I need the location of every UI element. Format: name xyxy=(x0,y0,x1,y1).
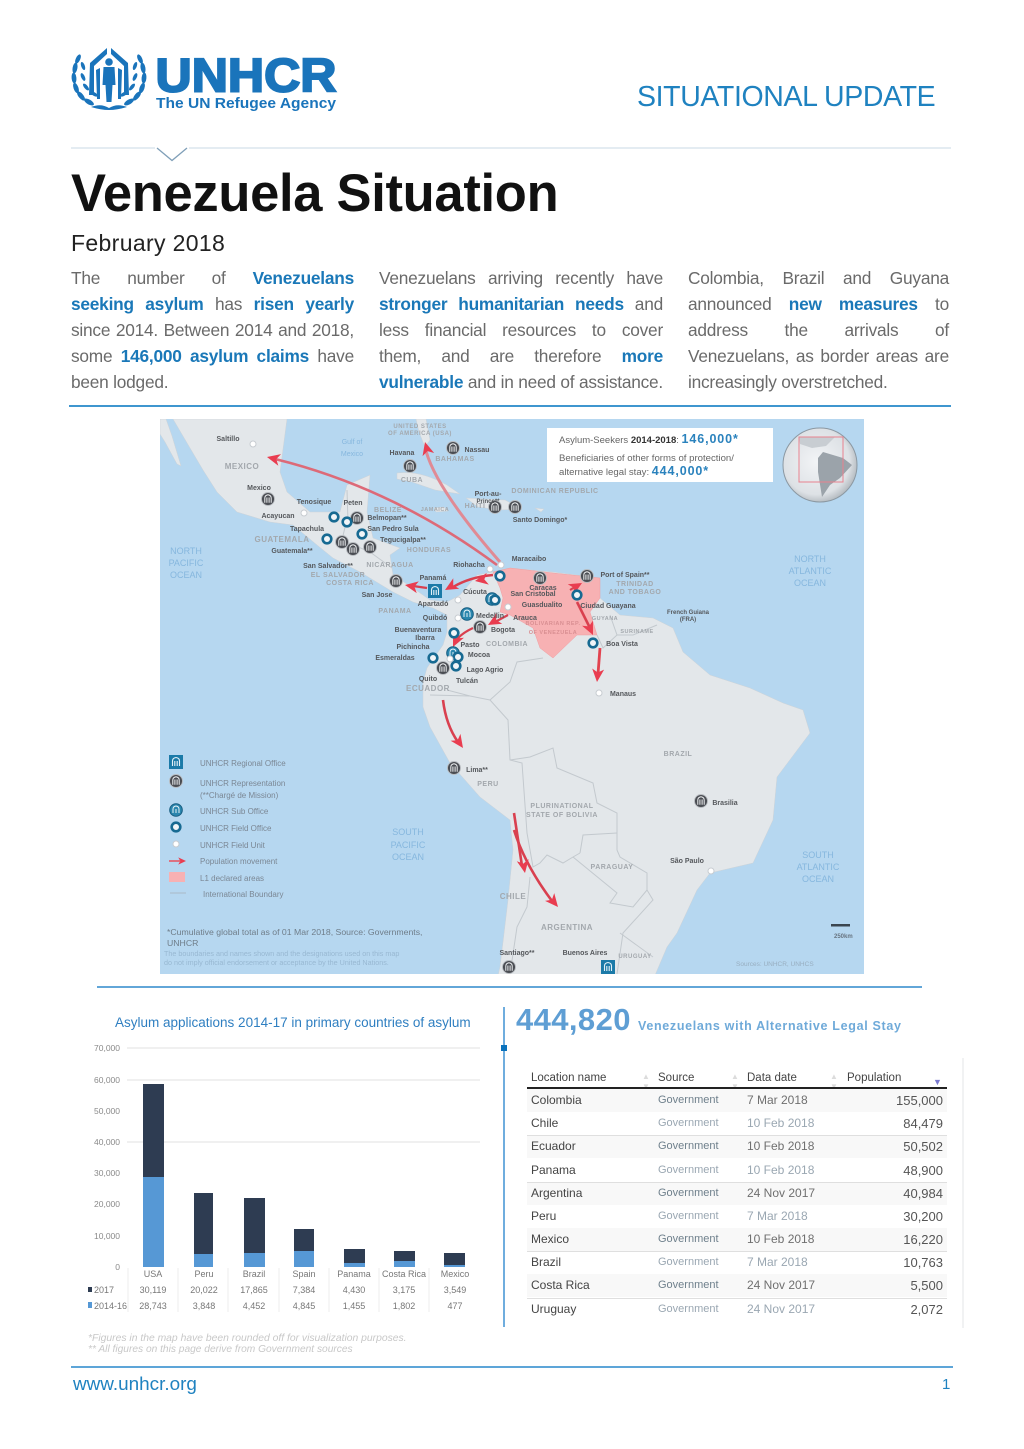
map legend: UNHCR Field Unit xyxy=(200,841,266,850)
map city labels: Caracas xyxy=(529,585,557,592)
map city labels: Acayucan xyxy=(261,513,295,520)
map ocean labels: ATLANTIC xyxy=(797,862,840,872)
table header: ▲ xyxy=(731,1072,739,1081)
map notes: The boundaries and names shown and the designations used on this map xyxy=(164,949,399,958)
table header: ▼ xyxy=(642,1082,650,1091)
text block: column 1: The number of Venezuelans xyxy=(71,268,354,288)
map country labels: MEXICO xyxy=(225,462,259,471)
map country labels: UNITED STATES xyxy=(393,424,447,430)
map ocean labels: OCEAN xyxy=(392,852,424,862)
map country labels: URUGUAY xyxy=(618,954,652,960)
chart legend xyxy=(88,1285,127,1311)
map arrowheads xyxy=(266,440,604,911)
chart data table xyxy=(139,1269,469,1311)
map city labels: Nassau xyxy=(465,447,489,454)
table: population by country: Brazil xyxy=(531,1254,561,1268)
table: population by country: Government xyxy=(658,1117,719,1129)
text block: column 3: Venezuelans, as border areas are xyxy=(688,346,949,366)
map notes: UNHCR xyxy=(167,938,198,948)
map city labels: Tulcán xyxy=(456,678,478,685)
footnotes xyxy=(88,1333,407,1355)
map globe locator xyxy=(783,428,857,502)
table: population by country: 16,220 xyxy=(903,1232,943,1246)
chart y axis: 60,000 xyxy=(94,1075,120,1085)
map city labels: Ciudad Guayana xyxy=(580,603,636,610)
table: population by country: 7 Mar 2018 xyxy=(747,1254,808,1268)
table: population by country: Government xyxy=(658,1302,719,1314)
text block: column 3 xyxy=(688,268,950,392)
text block: column 3: address the arrivals of xyxy=(688,320,949,340)
table: population by country: 7 Mar 2018 xyxy=(747,1093,808,1107)
table: population by country: Government xyxy=(658,1140,719,1152)
map country labels: OF AMERICA (USA) xyxy=(388,431,452,437)
chart y axis: 20,000 xyxy=(94,1199,120,1209)
text block: column 2: stronger humanitarian needs and xyxy=(379,294,663,314)
table: population by country: Government xyxy=(658,1164,719,1176)
map city labels: Lago Agrio xyxy=(467,667,503,674)
map legend: International Boundary xyxy=(203,890,284,899)
map city labels: San Pedro Sula xyxy=(367,526,419,533)
table: population by country: Colombia xyxy=(531,1093,582,1107)
chart data table: 20,022 xyxy=(190,1285,218,1295)
map city labels: Cúcuta xyxy=(463,589,487,596)
map ocean labels: SOUTH xyxy=(392,827,424,837)
map city labels: Boa Vista xyxy=(606,641,638,648)
text block: column 2: vulnerable and in need of assistance. xyxy=(379,372,663,392)
map city labels: Medellin xyxy=(476,613,504,620)
map city labels: Santo Domingo* xyxy=(513,517,567,524)
footnotes: ** All figures on this page derive from Government sources xyxy=(88,1344,353,1355)
map ocean labels: NORTH xyxy=(794,554,826,564)
table: population by country: Government xyxy=(658,1232,719,1244)
map country labels: BOLIVARIAN REP. xyxy=(526,621,580,627)
map city labels: Esmeraldas xyxy=(375,655,415,662)
table header: ▼ xyxy=(933,1077,942,1087)
text block: column 2: Venezuelans arriving recently have xyxy=(379,268,663,288)
chart data table: USA xyxy=(144,1269,162,1279)
text block: column 1: been lodged. xyxy=(71,372,168,392)
map country labels: CUBA xyxy=(401,477,423,484)
map country labels: BAHAMAS xyxy=(435,456,475,463)
table: population by country: 24 Nov 2017 xyxy=(747,1186,815,1200)
table: population by country: Government xyxy=(658,1210,719,1222)
map background: ocean xyxy=(160,419,864,974)
map legend: (**Chargé de Mission) xyxy=(200,791,279,800)
chart y axis: 50,000 xyxy=(94,1106,120,1116)
table: population by country: 7 Mar 2018 xyxy=(747,1208,808,1222)
map city labels: Quibdó xyxy=(423,615,447,622)
map country labels: PANAMA xyxy=(378,608,412,615)
chart y axis: 70,000 xyxy=(94,1043,120,1053)
map country labels: ECUADOR xyxy=(406,684,450,693)
map info box: totals: Beneficiaries of other forms of protection/ xyxy=(559,453,734,464)
map country labels: BRAZIL xyxy=(664,751,693,758)
map country labels: BELIZE xyxy=(374,507,402,514)
chart data table: Costa Rica xyxy=(382,1269,426,1279)
text block: column 2: them, and are therefore more xyxy=(379,346,663,366)
map city labels: Manaus xyxy=(610,691,636,698)
map country labels: PARAGUAY xyxy=(591,864,633,871)
map ocean labels xyxy=(169,439,840,884)
map city labels: Guatemala** xyxy=(271,548,313,555)
map country labels: CHILE xyxy=(500,892,526,901)
chart data table: 28,743 xyxy=(139,1301,167,1311)
table: population by country: 24 Nov 2017 xyxy=(747,1278,815,1292)
table: population by country: 5,500 xyxy=(910,1278,943,1292)
chart y axis: 0 xyxy=(115,1262,120,1272)
map country labels: ARGENTINA xyxy=(541,923,593,932)
chart data table: 3,848 xyxy=(193,1301,215,1311)
map city labels: (FRA) xyxy=(680,617,696,623)
map office markers xyxy=(250,441,714,974)
map: Venezuela situation in the Americas xyxy=(160,419,864,974)
map city labels: Belmopan** xyxy=(367,515,407,522)
chart legend: 2014-16 xyxy=(94,1301,127,1311)
map country labels: JAMAICA xyxy=(421,507,449,513)
map country labels: TRINIDAD xyxy=(616,581,654,588)
table header: ▲ xyxy=(830,1072,838,1081)
map land masses xyxy=(160,419,810,980)
table: population by country: Costa Rica xyxy=(531,1278,590,1292)
map city labels: Arauca xyxy=(513,615,537,622)
chart y axis: 10,000 xyxy=(94,1231,120,1241)
chart data table: 3,549 xyxy=(444,1285,466,1295)
map country labels: HONDURAS xyxy=(407,547,451,554)
chart data table: Spain xyxy=(292,1269,316,1279)
logo: UNHCR xyxy=(72,48,338,112)
map city labels: Ibarra xyxy=(415,635,435,642)
map ocean labels: Mexico xyxy=(341,451,363,458)
table: population by country: Government xyxy=(658,1278,719,1290)
chart legend: 2017 xyxy=(94,1285,114,1295)
table: population by country: Argentina xyxy=(531,1186,582,1200)
logo: UNHCR: UNHCR xyxy=(156,50,336,102)
table: population by country: 10 Feb 2018 xyxy=(747,1139,814,1153)
table: population by country: Mexico xyxy=(531,1232,569,1246)
map city labels: Mexico xyxy=(247,485,271,492)
map city labels: Port-au- xyxy=(475,491,502,498)
chart data table: 4,845 xyxy=(293,1301,315,1311)
table: population by country: 155,000 xyxy=(896,1093,943,1108)
map country labels: COSTA RICA xyxy=(326,580,374,587)
title: Venezuela Situation xyxy=(71,164,558,223)
map country labels: DOMINICAN REPUBLIC xyxy=(511,488,599,495)
map city labels: Port of Spain** xyxy=(600,572,650,579)
map city labels: Maracaibo xyxy=(512,556,546,563)
table: population by country: Government xyxy=(658,1256,719,1268)
map legend: UNHCR Representation xyxy=(200,779,285,788)
map city labels: Riohacha xyxy=(453,562,485,569)
chart data table: Brazil xyxy=(243,1269,265,1279)
map ocean labels: PACIFIC xyxy=(391,840,426,850)
chart bars xyxy=(143,1084,465,1267)
map ocean labels: PACIFIC xyxy=(169,558,204,568)
chart data table: 3,175 xyxy=(393,1285,415,1295)
map city labels: Tenosique xyxy=(297,499,331,506)
table: population by country: 10,763 xyxy=(903,1254,943,1270)
map city labels: Buenaventura xyxy=(395,627,441,634)
chart y axis: 30,000 xyxy=(94,1168,120,1178)
table: population by country: Peru xyxy=(531,1208,556,1222)
table header: Data date xyxy=(747,1072,797,1084)
table header: ▼ xyxy=(731,1082,739,1091)
map city labels: Pasto xyxy=(460,642,480,649)
map info box: totals: alternative legal stay: 444,000* xyxy=(559,464,709,478)
big number: 444,820 xyxy=(516,1002,631,1037)
table: population by country: Government xyxy=(658,1094,719,1106)
map city labels: Saltillo xyxy=(217,436,239,443)
table: population by country: 50,502 xyxy=(903,1139,943,1154)
table: population by country xyxy=(527,1072,947,1316)
text block: column 1 xyxy=(71,268,354,392)
map ocean labels: ATLANTIC xyxy=(789,566,832,576)
map city labels: Buenos Aires xyxy=(563,950,608,957)
map country labels: GUATEMALA xyxy=(254,535,310,544)
map city labels xyxy=(217,436,738,957)
map country labels: HAITI xyxy=(465,503,485,510)
table: population by country: 10 Feb 2018 xyxy=(747,1116,814,1130)
table header: Location name xyxy=(531,1072,606,1084)
map city labels: Brasilia xyxy=(712,800,738,807)
map country labels: COLOMBIA xyxy=(486,641,528,648)
table: population by country: 10 Feb 2018 xyxy=(747,1162,814,1176)
chart y axis: 40,000 xyxy=(94,1137,120,1147)
text block: column 2 xyxy=(379,268,663,392)
table: population by country: 24 Nov 2017 xyxy=(747,1302,815,1316)
map notes: *Cumulative global total as of 01 Mar 2018, Source: Governments, xyxy=(167,927,422,937)
table: population by country: Government xyxy=(658,1186,719,1198)
footer: website: www.unhcr.org xyxy=(73,1374,197,1395)
text block: column 3: announced new measures to xyxy=(688,294,949,314)
map country labels: NICARAGUA xyxy=(366,562,414,569)
chart data table: 1,455 xyxy=(343,1301,365,1311)
Venezuela declared area xyxy=(493,568,600,658)
chart data table: 7,384 xyxy=(293,1285,315,1295)
subtitle: date: February 2018 xyxy=(71,230,225,256)
map country labels: EL SALVADOR xyxy=(311,572,365,579)
text block: column 1: some 146,000 asylum claims have xyxy=(71,346,354,366)
map city labels: Bogota xyxy=(491,627,515,634)
table header: Source xyxy=(658,1072,694,1084)
map info box: totals xyxy=(547,428,773,482)
map city labels: Prince** xyxy=(476,499,500,505)
map scale bar: 250km xyxy=(834,934,853,940)
table: population by country: Uruguay xyxy=(531,1302,576,1316)
chart data table: 17,865 xyxy=(240,1285,268,1295)
map city labels: Tegucigalpa** xyxy=(380,537,426,544)
map country labels: OF VENEZUELA xyxy=(529,630,577,636)
map legend: Population movement xyxy=(200,857,278,866)
map country labels xyxy=(225,424,693,960)
footnotes: *Figures in the map have been rounded off for visualization purposes. xyxy=(88,1333,407,1344)
map legend: L1 declared areas xyxy=(200,874,264,883)
chart data table: Panama xyxy=(337,1269,371,1279)
header divider with chevron xyxy=(71,147,951,162)
table: population by country: Chile xyxy=(531,1116,558,1130)
map legend: UNHCR Field Office xyxy=(200,824,272,833)
table header: ▲ xyxy=(642,1072,650,1081)
table: population by country: 10 Feb 2018 xyxy=(747,1232,814,1246)
map city labels: Peten xyxy=(343,500,363,507)
text block: column 3: increasingly overstretched. xyxy=(688,372,888,392)
table: population by country: Ecuador xyxy=(531,1139,576,1153)
table: population by country: Panama xyxy=(531,1162,576,1176)
map ocean labels: OCEAN xyxy=(170,570,202,580)
map international boundaries xyxy=(342,490,657,974)
footer: page number: 1 xyxy=(942,1376,950,1393)
map city labels: San Jose xyxy=(362,592,392,599)
heading: situational update: SITUATIONAL UPDATE xyxy=(637,81,935,113)
map info box: totals: Asylum-Seekers 2014-2018: 146,000* xyxy=(559,432,739,446)
chart title: Asylum applications 2014-17 in primary countries of asylum xyxy=(115,1015,471,1030)
panel: alternative legal stay xyxy=(501,1007,964,1328)
map ocean labels: OCEAN xyxy=(802,874,834,884)
text block: column 1: since 2014. Between 2014 and 2018, xyxy=(71,320,354,340)
chart data table: 4,430 xyxy=(343,1285,365,1295)
map notes xyxy=(164,927,422,967)
map city labels: Apartadó xyxy=(418,601,448,608)
text block: column 2: less financial resources to cover xyxy=(379,320,663,340)
chart data table: 1,802 xyxy=(393,1301,415,1311)
map ocean labels: Gulf of xyxy=(342,439,362,446)
chart data table: 477 xyxy=(447,1301,463,1311)
map city labels: French Guiana xyxy=(667,610,710,616)
map city labels: Mocoa xyxy=(468,652,490,659)
map legend xyxy=(169,755,286,899)
chart data table: Mexico xyxy=(441,1269,469,1279)
map city labels: Quito xyxy=(419,676,437,683)
chart data table: 4,452 xyxy=(243,1301,265,1311)
map sources: Sources: UNHCR, UNHCS xyxy=(736,961,814,968)
text block: column 3: Colombia, Brazil and Guyana xyxy=(688,268,949,288)
table: population by country: 48,900 xyxy=(903,1162,943,1178)
map ocean labels: OCEAN xyxy=(794,578,826,588)
map country labels: STATE OF BOLIVIA xyxy=(526,812,598,819)
chart y axis xyxy=(94,1043,120,1272)
table: population by country: 2,072 xyxy=(910,1302,943,1316)
map ocean labels: SOUTH xyxy=(802,850,834,860)
map country labels: PERU xyxy=(477,781,499,788)
map city labels: Lima** xyxy=(466,767,488,774)
map country labels: SURINAME xyxy=(620,629,654,635)
chart: asylum applications stacked bars xyxy=(88,1015,480,1355)
table: population by country: 84,479 xyxy=(903,1116,943,1131)
map ocean labels: NORTH xyxy=(170,546,202,556)
map city labels: San Cristobal xyxy=(510,591,556,598)
table header xyxy=(531,1072,942,1091)
map city labels: São Paulo xyxy=(670,858,704,865)
map country labels: PLURINATIONAL xyxy=(530,803,594,810)
map city labels: Santiago** xyxy=(499,950,535,957)
text block: column 1: seeking asylum has risen yearly xyxy=(71,294,354,314)
map city labels: San Salvador** xyxy=(303,563,353,570)
logo: UNHCR: The UN Refugee Agency xyxy=(156,95,337,112)
map city labels: Pichincha xyxy=(396,644,430,651)
map city labels: Tapachula xyxy=(290,526,324,533)
table: population by country: 40,984 xyxy=(903,1186,943,1200)
table header: Population xyxy=(847,1072,901,1084)
map legend: UNHCR Regional Office xyxy=(200,759,286,768)
map scale bar xyxy=(831,924,853,940)
chart data table: Peru xyxy=(194,1269,214,1279)
map notes: do not imply official endorsement or acceptance by the United Nations. xyxy=(164,958,389,967)
map country labels: GUYANA xyxy=(592,616,618,622)
map city labels: Havana xyxy=(390,450,415,457)
map country labels: AND TOBAGO xyxy=(609,589,661,596)
map legend: UNHCR Sub Office xyxy=(200,807,269,816)
subtitle: alternative legal stay: Venezuelans with Alternative Legal Stay xyxy=(638,1019,902,1033)
map city labels: Guasdualito xyxy=(522,602,562,609)
map population movement arrows xyxy=(275,451,600,901)
chart data table: 30,119 xyxy=(140,1285,166,1295)
table: population by country: 30,200 xyxy=(903,1208,943,1224)
map city labels: Panamá xyxy=(420,575,447,582)
table header: ▼ xyxy=(830,1082,838,1091)
